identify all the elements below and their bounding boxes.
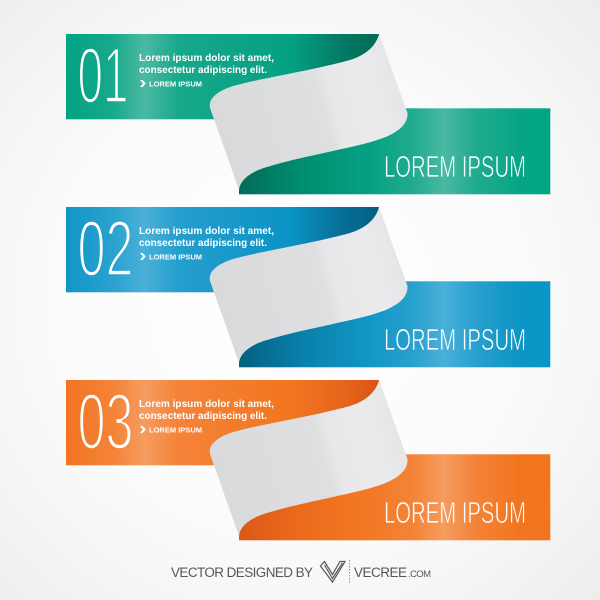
description text: Lorem ipsum dolor sit amet, (139, 399, 274, 410)
link label: LOREM IPSUM (149, 252, 202, 262)
description text: Lorem ipsum dolor sit amet, (139, 53, 274, 64)
panel: step 02 blue ribbon (66, 204, 550, 367)
icon: chevron (140, 80, 146, 87)
panel: step 01 green ribbon (66, 30, 550, 194)
curled paper fold (210, 207, 408, 363)
panel: step 01 green ribbon: consectetur adipiscing elit. (139, 65, 267, 76)
bottom band (239, 281, 550, 367)
icon: chevron (140, 253, 146, 260)
link label: LOREM IPSUM (149, 426, 202, 434)
heading: LOREM IPSUM (384, 495, 526, 530)
description text: Lorem ipsum dolor sit amet, (139, 226, 274, 237)
panel: step 02 blue ribbon: consectetur adipiscing elit. (139, 238, 267, 249)
link label: LOREM IPSUM (149, 80, 202, 88)
bottom band (239, 454, 550, 540)
curled paper fold (210, 34, 408, 190)
top band (66, 34, 379, 119)
panel: step 03 orange ribbon (66, 376, 550, 540)
heading: LOREM IPSUM (384, 149, 526, 184)
number 02: 02 (78, 204, 134, 292)
footer credit (171, 560, 431, 583)
panel: step 03 orange ribbon: consectetur adipiscing elit. (139, 411, 267, 422)
top band (66, 380, 379, 465)
dashed divider (348, 560, 350, 583)
icon: chevron (140, 426, 146, 433)
bottom band (239, 108, 550, 194)
brand domain: .COM (408, 569, 431, 580)
number 01: 01 (78, 30, 128, 120)
icon: V logo (320, 562, 345, 582)
top band (66, 207, 379, 292)
heading: LOREM IPSUM (384, 322, 526, 357)
brand name: VECREE (354, 565, 407, 580)
credit text: VECTOR DESIGNED BY (171, 565, 313, 580)
curled paper fold (210, 380, 408, 536)
number 03: 03 (78, 376, 134, 466)
